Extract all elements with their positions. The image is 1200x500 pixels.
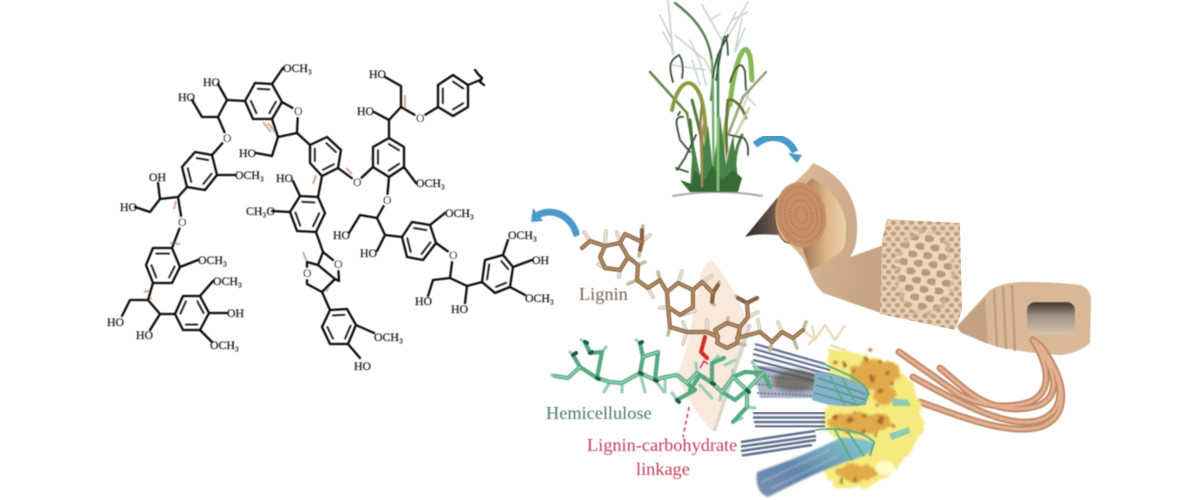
sugar backbone [555,342,770,422]
atom labels: HO [239,146,257,160]
cellulose and matrix assembly [741,325,925,497]
atom labels: HO [451,302,469,316]
leaves and stems [675,3,713,100]
atom labels: OCH₃ [213,274,242,288]
black tip [745,198,790,237]
outer bark ring [772,194,800,244]
cellulose fibril bundle 4 [757,438,875,497]
stage: plant stem cross-section [745,163,884,313]
lignin molecule model [582,226,806,358]
label: Lignin-carbohydrate linkage: Lignin-carbohydrate [587,435,737,455]
teal fibril section [812,372,869,406]
stem body and cone [775,163,884,313]
atom labels: O [334,257,343,271]
linkage dashed pointer [683,361,708,437]
atom labels: HO [276,171,294,185]
atom labels: O [449,248,458,262]
brown flecks [833,348,895,484]
atom labels: HO [369,67,387,81]
atom labels: O [303,266,312,280]
skeletal bonds [122,68,532,358]
atom labels: OH [227,306,245,320]
pale panicles [660,0,755,110]
label: Lignin: Lignin [579,284,628,304]
annotation marks [144,95,405,300]
atom labels: OCH₃ [210,338,239,352]
atom labels: O [353,175,362,189]
atom labels: O [223,131,232,145]
label: Lignin-carbohydrate linkage: linkage [636,459,690,479]
ground line [673,192,762,196]
atom labels: OCH₃ [525,291,554,305]
atom labels: HO [357,104,375,118]
carbon backbone [582,230,803,348]
hydrogen sticks [552,340,760,422]
lumen opening [1027,302,1075,334]
stage: honeycomb cell wall tissue [880,219,962,330]
atom labels: OCH₃ [198,253,227,267]
atom labels: O [294,104,303,118]
atom labels: OH [532,253,550,267]
small teal fibrils [889,398,911,440]
atom labels: HO [136,328,154,342]
atom labels: OCH₃ [508,228,537,242]
stage: single fibre with lumen [957,282,1091,355]
pink bonding plane [677,260,752,431]
atom labels: OCH₃ [416,176,445,190]
cellulose fibril bundle 1 [753,344,845,398]
lignin chemical structure [107,61,554,373]
atom labels: OCH₃ [283,61,312,75]
label: Hemicellulose: Hemicellulose [546,403,652,423]
atom labels: HO [354,359,372,373]
atom labels: HO [120,200,138,214]
atom labels: OCH₃ [445,206,474,220]
red linkage bond [701,337,707,358]
atom labels [107,61,554,373]
aromatic inner bonds [151,82,508,339]
oxygen atom gaps [177,106,459,279]
icon: grass plant [650,0,766,196]
log end with rings [771,178,831,252]
atom labels: HO [333,228,351,242]
atom labels: CH₃O [246,204,276,218]
cellulose fibril bundle 2 [753,413,825,426]
atom labels: O [383,193,392,207]
grass base [690,115,738,192]
atom labels: HO [203,75,221,89]
hollow interior [800,178,846,270]
hydrogen sticks [584,226,806,350]
faint lignin branch [803,325,845,350]
bright patch [875,461,895,475]
atom labels: HO [360,246,378,260]
arrow: grass to stem [755,138,802,163]
yellow matrix cloud [822,348,925,487]
atom labels: HO [178,90,196,104]
green wrapping strands [815,362,874,460]
cellulose fibril bundle 3 [741,431,816,456]
orange matrix patches [828,360,900,481]
atom labels: HO [415,294,433,308]
atom labels: OCH₃ [374,330,403,344]
microfibril bundle [899,340,1062,429]
atom labels: HO [107,315,125,329]
atom labels: OH [149,170,167,184]
hemicellulose molecule model [552,340,770,422]
atom labels: O [416,111,425,125]
atom labels: O [178,215,187,229]
dark shaded core [773,370,817,392]
atom labels: OCH₃ [235,168,264,182]
arrow: lignin model to chemical structure [531,208,577,236]
